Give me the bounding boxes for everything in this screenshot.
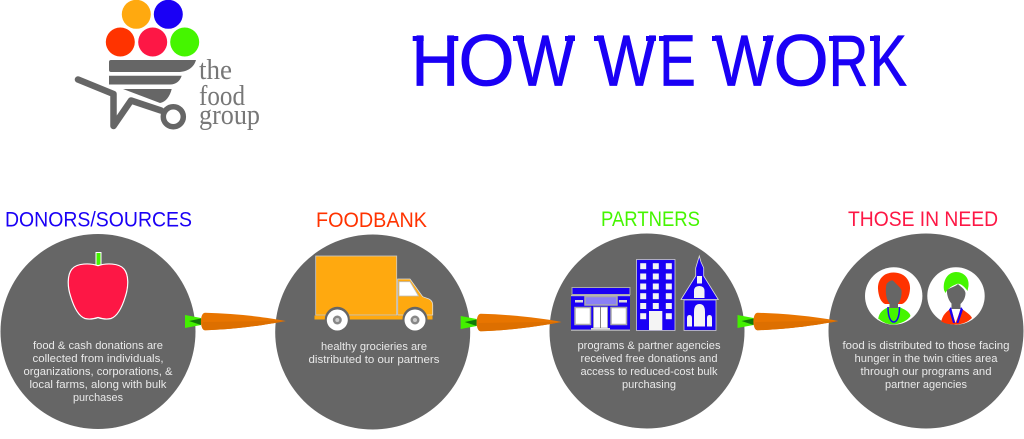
text: donors description: purchases [73, 392, 123, 404]
logo wordmark: food [199, 81, 245, 112]
circle: those in need [828, 234, 1024, 428]
panel: foodbank [275, 209, 470, 430]
text: foodbank description: distributed to our partners [308, 354, 440, 366]
panel: donors/sources [0, 208, 196, 429]
icon: apple [68, 252, 128, 319]
text: donors description: organizations, corporations, & [24, 366, 172, 378]
arrow: carrot 2 [461, 314, 561, 331]
icon: delivery truck [314, 256, 433, 332]
heading: partners: PARTNERS [601, 208, 700, 231]
text: donors description [24, 340, 172, 404]
text: foodbank description [308, 341, 440, 366]
text: donors description: food & cash donations are [33, 340, 163, 352]
title: K [870, 22, 907, 102]
logo fruit balls [106, 0, 199, 57]
heading: those in need: THOSE IN NEED [848, 208, 998, 231]
title: R [829, 22, 868, 102]
text: those in need description: partner agencies [885, 379, 967, 391]
icon: church [681, 256, 718, 330]
logo wheelbarrow [78, 60, 196, 127]
title: W [516, 22, 575, 102]
text: partners description: access to reduced-cost bulk [580, 366, 718, 378]
text: partners description [578, 340, 720, 391]
arrow: carrot 1 [185, 313, 286, 330]
logo wordmark [199, 55, 260, 131]
icon: woman portrait [865, 267, 922, 325]
text: those in need description [842, 340, 1010, 391]
text: donors description: local farms, along with bulk [30, 379, 167, 391]
title: O [458, 22, 515, 102]
icon: man portrait [927, 267, 985, 325]
circle: partners [550, 234, 744, 428]
panel: those in need [828, 208, 1024, 428]
title: O [774, 22, 829, 102]
title: H [412, 22, 459, 102]
heading: foodbank: FOODBANK [316, 209, 427, 232]
logo: the food group [78, 0, 260, 131]
text: partners description: received free donations and [580, 353, 718, 365]
text: partners description: purchasing [622, 379, 676, 391]
title: E [659, 22, 696, 102]
text: partners description: programs & partner agencies [578, 340, 720, 352]
circle: donors [0, 234, 196, 429]
heading: donors/sources: DONORS/SOURCES [5, 208, 192, 232]
text: those in need description: through our programs and [860, 366, 992, 378]
text: foodbank description: healthy grocieries are [321, 341, 427, 353]
circle: foodbank [275, 234, 470, 430]
text: those in need description: food is distributed to those facing [842, 340, 1010, 352]
title: W [715, 22, 774, 102]
arrow: carrot 3 [738, 313, 838, 330]
icon: storefront [571, 288, 630, 331]
text: donors description: collected from individuals, [32, 353, 164, 365]
text: those in need description: hunger in the twin cities area [854, 353, 998, 365]
title [412, 22, 907, 102]
logo wordmark: group [199, 100, 260, 131]
logo wordmark: the [199, 55, 232, 86]
title: W [597, 22, 656, 102]
panel: partners [550, 208, 744, 428]
icon: office tower [636, 260, 675, 330]
